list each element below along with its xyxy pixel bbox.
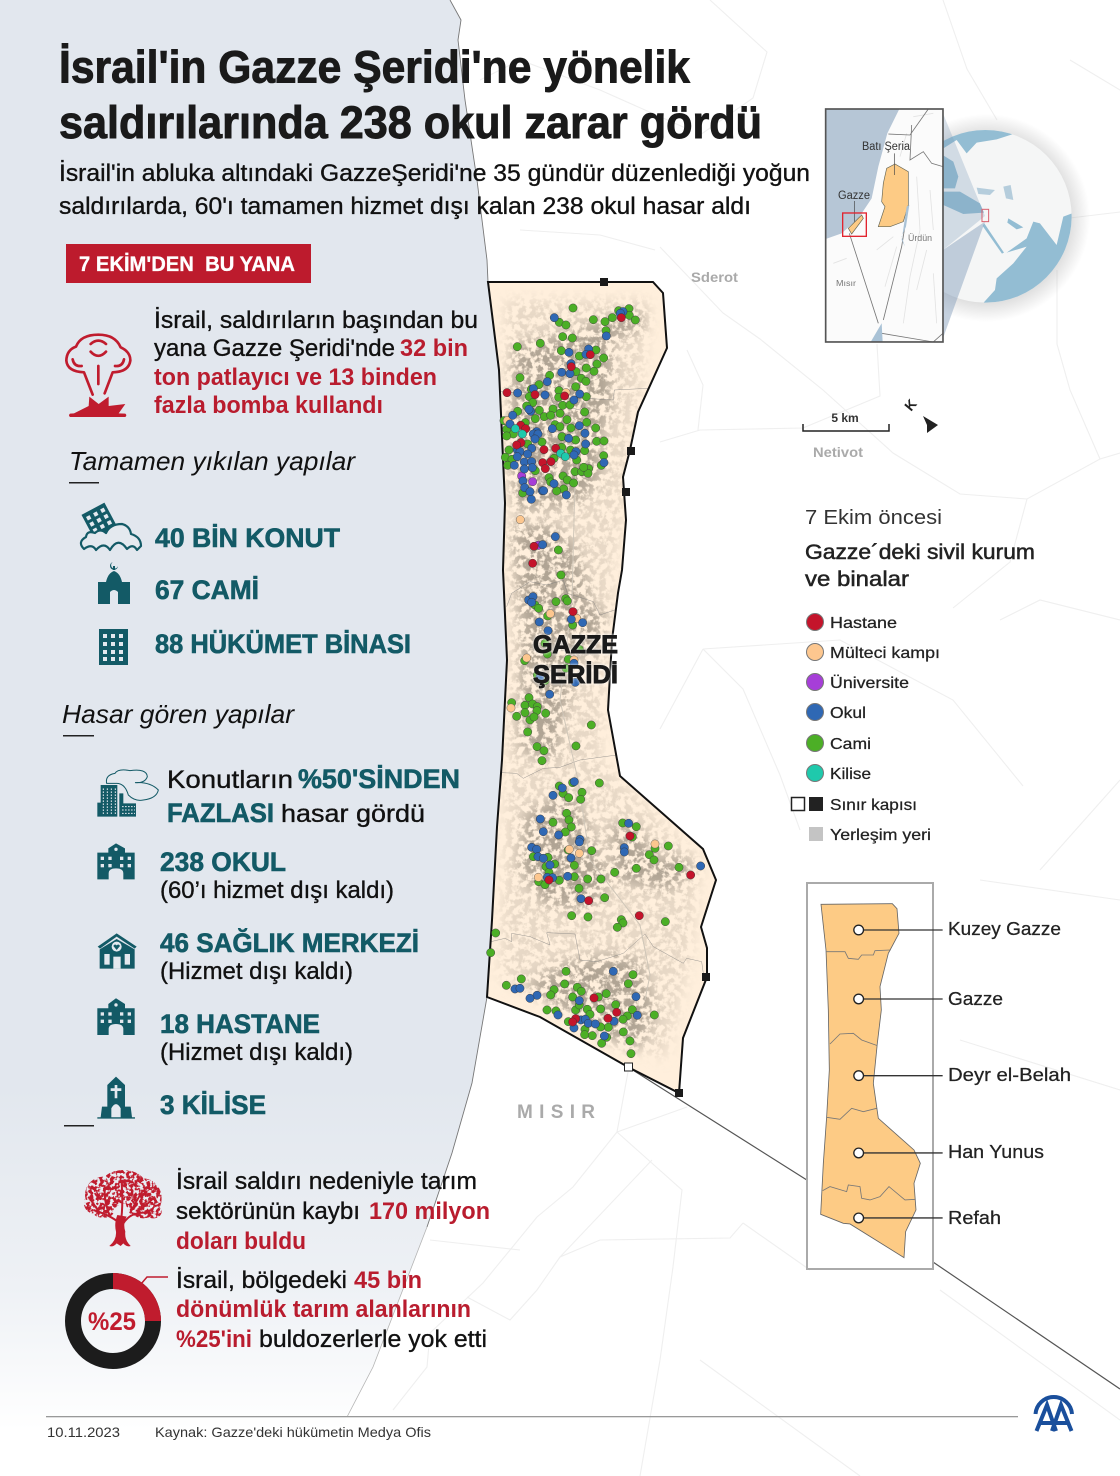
- inset labels: [836, 141, 932, 288]
- inset Dead Sea and Gulf: [871, 205, 909, 342]
- explosives text: 32 bin: [400, 335, 468, 362]
- title: saldırılarında 238 okul zarar gördü: [59, 97, 762, 148]
- inset locator map: [826, 109, 943, 342]
- AA logo: [1036, 1397, 1072, 1431]
- inset labels: Gazze: [838, 190, 870, 202]
- stat: hospitals: 18 HASTANE: [160, 1009, 320, 1039]
- border line to the southeast: [628, 1067, 1120, 1389]
- place label: Sderot: Sderot: [691, 269, 738, 285]
- Gazze red rectangle: [843, 213, 866, 236]
- inset sea: [826, 109, 899, 239]
- West Bank: [878, 164, 908, 227]
- inset Gaza: [848, 215, 863, 234]
- legend: [792, 507, 1035, 844]
- explosives text: ton patlayıcı ve 13 binden: [154, 364, 437, 391]
- sea and left panel background: [0, 0, 507, 1430]
- agriculture loss text: 170 milyon: [369, 1198, 490, 1225]
- source: Kaynak: Gazze'deki hükümetin Medya Ofis: [155, 1424, 431, 1440]
- markers: [854, 925, 863, 1223]
- legend item: settlement: Yerleşim yeri: [830, 827, 931, 844]
- governorate dividers: [823, 950, 916, 1200]
- heading: destroyed structures: Tamamen yıkılan yapılar: [69, 446, 356, 476]
- stat: mosques: 67 CAMİ: [155, 575, 259, 605]
- blue dots: schools: [506, 307, 705, 1040]
- legend item: hospital: [806, 614, 897, 632]
- legend item: church: Kilise: [830, 766, 871, 783]
- subtitle: [59, 160, 810, 220]
- donut chart: [73, 1277, 168, 1361]
- Gaza outline: [487, 282, 716, 1093]
- date: 10.11.2023: [47, 1424, 120, 1440]
- inset frame: [826, 109, 943, 342]
- icon: school: [97, 843, 135, 879]
- icon: mosque: [98, 562, 130, 604]
- explosives text: [154, 307, 478, 419]
- title: [59, 42, 762, 148]
- stat: housing damage: %50'SİNDEN: [298, 764, 460, 794]
- agriculture loss text: [176, 1168, 490, 1255]
- map: Gaza Strip: [486, 278, 716, 1097]
- main road: [560, 340, 650, 1000]
- legend item: school: Okul: [830, 705, 866, 722]
- icon: olive tree: [84, 1170, 162, 1246]
- legend item: university: Üniversite: [830, 674, 909, 692]
- green dots: mosques: [486, 304, 683, 1058]
- icon: health centre: [98, 933, 137, 969]
- farmland text: dönümlük tarım alanlarının: [176, 1296, 471, 1323]
- title: İsrail'in Gazze Şeridi'ne yönelik: [59, 42, 691, 92]
- scale bar: 5 km: [831, 411, 859, 425]
- governorate labels: Gazze: [948, 989, 1003, 1009]
- divider under churches: [64, 1125, 94, 1126]
- icon: damaged buildings: [97, 770, 158, 817]
- legend item: mosque: [806, 734, 871, 753]
- stat: housing damage: [167, 764, 460, 828]
- scale bar: [803, 411, 889, 431]
- agriculture loss text: sektörünün kaybı: [176, 1198, 360, 1225]
- donut chart: %25: [88, 1308, 136, 1336]
- coastline: [427, 0, 488, 1227]
- stat: schools: 238 OKUL: [160, 847, 286, 877]
- map label: Gazze Şeridi: [533, 631, 618, 689]
- stat: housing damage: hasar gördü: [281, 800, 425, 828]
- icon: government building: [99, 629, 128, 665]
- governorate borders: [491, 388, 703, 973]
- legend heading: Gazze´deki sivil kurum: [805, 541, 1035, 564]
- subtitle: saldırılarda, 60'ı tamamen hizmet dışı kalan 238 okul hasar aldı: [59, 193, 751, 220]
- date banner: [66, 244, 311, 283]
- icon: hospital: [97, 998, 135, 1035]
- stat: churches: 3 KİLİSE: [160, 1090, 266, 1120]
- place label: Mısır: MISIR: [517, 1102, 595, 1123]
- north arrow: [901, 396, 938, 433]
- sparse settlements texture: [500, 300, 700, 1060]
- legend item: refugee camp: Mülteci kampı: [830, 645, 940, 662]
- legend item: mosque: Cami: [830, 736, 871, 753]
- view cone lower: [943, 222, 985, 338]
- locator rectangle: [982, 209, 989, 222]
- coastline fading south: [347, 1227, 427, 1417]
- explosives text: fazla bomba kullandı: [154, 392, 383, 419]
- view cone: [943, 113, 985, 250]
- orange dots: refugee camps: [503, 388, 659, 881]
- farmland text: [176, 1267, 487, 1353]
- date banner: 7 EKİM'DEN BU YANA: [79, 253, 295, 276]
- Gaza territory: [487, 282, 716, 1093]
- governorate labels: Refah: [948, 1208, 1001, 1228]
- inset box: [807, 883, 933, 1269]
- stat: schools: (60’ı hizmet dışı kaldı): [160, 877, 394, 904]
- governorate labels: Han Yunus: [948, 1142, 1044, 1162]
- legend item: border crossing: Sınır kapısı: [830, 797, 917, 814]
- globe oceans: [940, 127, 1077, 307]
- map label: Gazze Şeridi: ŞERİDİ: [533, 661, 618, 689]
- stat: homes: 40 BİN KONUT: [155, 523, 340, 553]
- stat: health centres: 46 SAĞLIK MERKEZİ: [160, 927, 419, 958]
- legend item: university: [806, 674, 909, 692]
- stat: housing damage: Konutların: [167, 766, 293, 794]
- farmland text: İsrail, bölgedeki: [176, 1267, 347, 1294]
- legend heading: [805, 507, 1035, 591]
- governorate labels: Kuzey Gazze: [948, 919, 1061, 939]
- heading: damaged structures: Hasar gören yapılar: [62, 699, 295, 729]
- stat: schools: [160, 847, 394, 904]
- legend heading: ve binalar: [805, 568, 909, 591]
- agriculture loss text: İsrail saldırı nedeniyle tarım: [176, 1168, 477, 1195]
- legend item: hospital: Hastane: [830, 615, 897, 632]
- inset labels: Ürdün: [908, 233, 932, 244]
- purple dots: universities: [517, 472, 542, 549]
- teal dots: churches: [511, 424, 569, 461]
- legend item: border crossing: [792, 797, 917, 814]
- icon: collapsing building: [81, 503, 141, 550]
- legend item: church: [806, 764, 871, 783]
- inset labels: Batı Şeria: [862, 141, 911, 153]
- stat: government buildings: 88 HÜKÜMET BİNASI: [155, 629, 411, 659]
- stat: health centres: (Hizmet dışı kaldı): [160, 958, 353, 985]
- background map roads: [393, 0, 1120, 1476]
- stat: housing damage: FAZLASI: [167, 798, 274, 828]
- governorate labels: [948, 919, 1071, 1228]
- icon: church: [97, 1077, 135, 1119]
- agriculture loss text: doları buldu: [176, 1228, 306, 1255]
- place label: Netivot: Netivot: [813, 444, 863, 460]
- globe locator: [944, 116, 1085, 336]
- subtitle: İsrail'in abluka altındaki GazzeŞeridi'ne 35 gündür düzenlediği yoğun: [59, 160, 810, 187]
- settlements texture: [510, 310, 695, 1050]
- inset borders: [849, 109, 943, 342]
- icon: explosion: [66, 335, 130, 417]
- globe: [899, 130, 1072, 303]
- leader lines: [859, 930, 943, 1218]
- farmland text: 45 bin: [354, 1267, 422, 1294]
- legend item: refugee camp: [806, 644, 940, 662]
- stat: health centres: [160, 927, 419, 985]
- stat: hospitals: (Hizmet dışı kaldı): [160, 1039, 353, 1066]
- inset labels: Mısır: [836, 278, 856, 288]
- governorate labels: Deyr el-Belah: [948, 1065, 1071, 1085]
- farmland text: %25'ini: [176, 1326, 252, 1353]
- globe shadow: [882, 114, 1090, 322]
- red dots: hospitals: [503, 313, 695, 1026]
- explosives text: İsrail, saldırıların başından bu: [154, 307, 478, 334]
- border crossings: [600, 278, 710, 1097]
- explosives text: yana Gazze Şeridi'nde: [154, 335, 395, 362]
- inset terrain: [833, 113, 937, 323]
- legend heading: 7 Ekim öncesi: [805, 507, 942, 529]
- farmland text: buldozerlerle yok etti: [259, 1326, 487, 1353]
- governorates inset map: [807, 883, 943, 1269]
- north arrow: K: [901, 396, 920, 414]
- map label: Gazze Şeridi: GAZZE: [533, 631, 618, 659]
- legend item: school: [806, 704, 866, 722]
- stat: hospitals: [160, 1009, 353, 1066]
- governorates shape: [821, 904, 920, 1258]
- Gazze leader: [854, 153, 894, 222]
